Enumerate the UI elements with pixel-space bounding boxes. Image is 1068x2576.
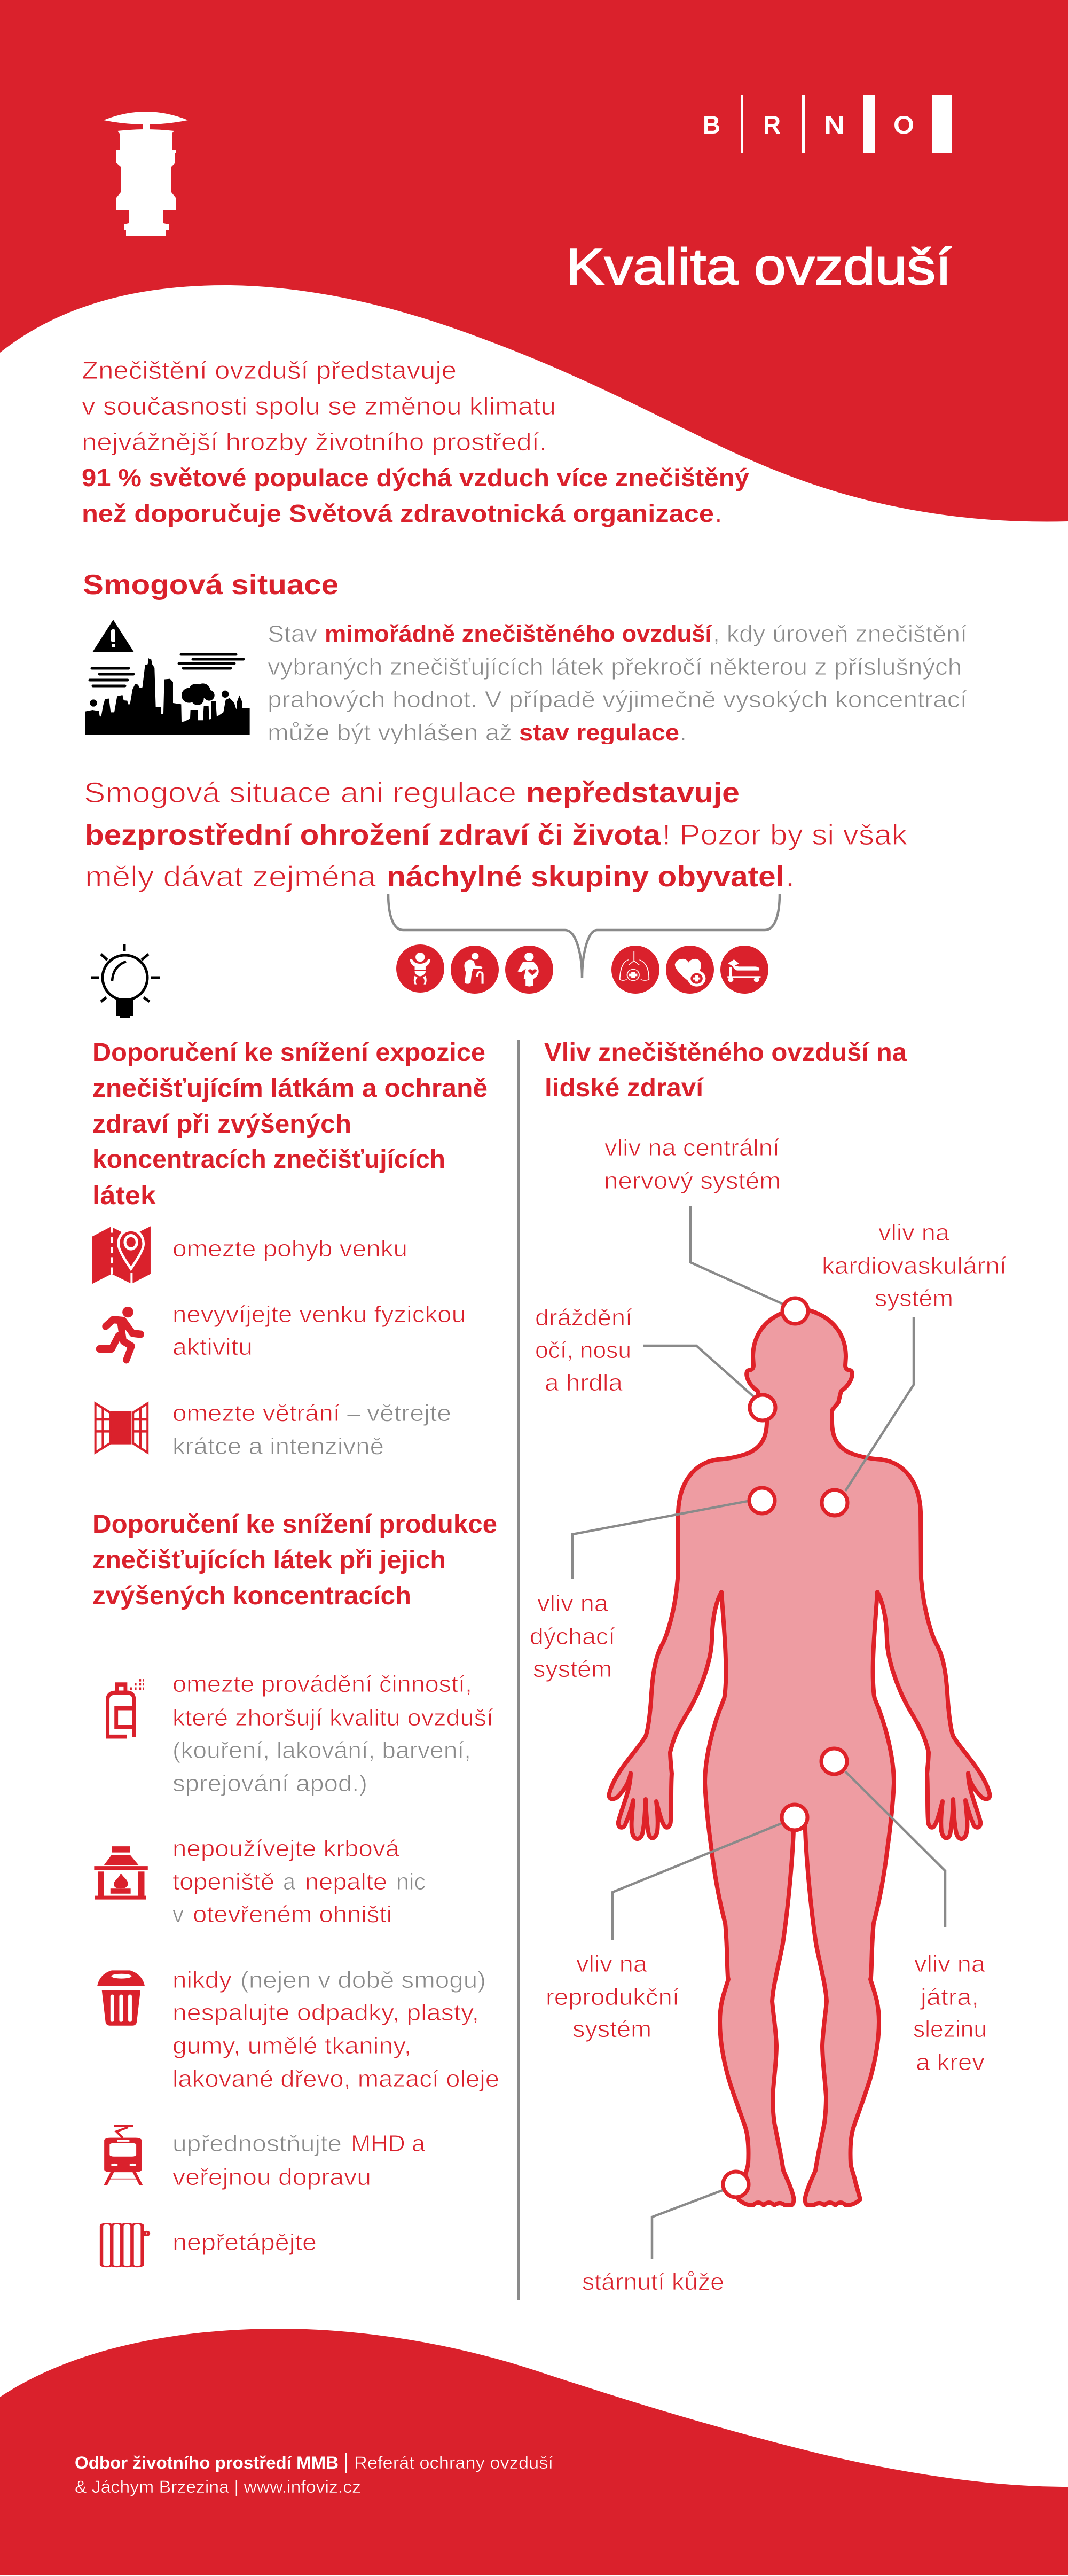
label: reproductive system: systém xyxy=(572,2016,651,2042)
intro text: nejvážnější hrozby životního prostředí. xyxy=(82,428,547,456)
brace xyxy=(388,894,780,978)
item: avoid physical activity: nevyvíjejte venku fyzickou xyxy=(172,1301,466,1328)
statement: no direct threat: měly dávat zejména xyxy=(85,861,376,893)
heading: exposure reduction: koncentracích znečišťujících xyxy=(92,1145,445,1174)
icon: radiator xyxy=(101,2224,148,2267)
footer credits: Referát ochrany ovzduší xyxy=(354,2453,553,2472)
item: limit ventilation xyxy=(172,1400,451,1459)
label: central nervous system: vliv na centrální xyxy=(604,1135,780,1161)
label: skin aging: stárnutí kůže xyxy=(582,2269,724,2295)
logo: BRNO: B xyxy=(703,111,720,139)
item: never burn waste: (nejen v době smogu) xyxy=(240,1967,486,1993)
paragraph: smog situation definition xyxy=(262,621,968,751)
item: no fireplaces: nepoužívejte krbová xyxy=(172,1836,400,1862)
logo: BRNO: R xyxy=(763,111,781,139)
heading: production reduction: zvýšených koncentracích xyxy=(92,1582,411,1610)
item: never burn waste: nespalujte odpadky, plasty, xyxy=(172,2000,479,2026)
item: no fireplaces: v xyxy=(172,1901,184,1927)
paragraph: smog situation definition: stav regulace xyxy=(519,720,679,746)
item: limit ventilation: – xyxy=(347,1400,361,1426)
icon: spray can xyxy=(106,1680,144,1737)
footer credits xyxy=(75,2453,553,2496)
statement: no direct threat xyxy=(84,777,908,893)
heading: production reduction xyxy=(92,1510,497,1610)
item: no fireplaces: otevřeném ohništi xyxy=(193,1901,392,1927)
item: limit polluting activities: omezte provádění činností, xyxy=(172,1671,472,1697)
item: never burn waste: nikdy xyxy=(172,1967,232,1993)
footer wave xyxy=(0,2329,1068,2575)
item: no fireplaces: topeniště xyxy=(172,1869,274,1895)
label: liver, spleen and blood: vliv na xyxy=(914,1951,986,1977)
intro text: . xyxy=(715,499,722,527)
icon: trash bin xyxy=(97,1970,145,2026)
label: cardiovascular system: systém xyxy=(875,1285,953,1312)
item: never burn waste xyxy=(172,1967,499,2092)
statement: no direct threat: náchylné skupiny obyvatel xyxy=(387,861,784,893)
icons: vulnerable groups xyxy=(396,944,768,994)
label: reproductive system: vliv na xyxy=(576,1951,648,1977)
label: cardiovascular system: kardiovaskulární xyxy=(822,1253,1007,1279)
label: central nervous system xyxy=(604,1135,781,1194)
intro text xyxy=(82,356,749,527)
human body figure xyxy=(609,1309,990,2205)
label: liver, spleen and blood xyxy=(913,1951,987,2075)
heading: health effects: Vliv znečištěného ovzduší na xyxy=(544,1039,907,1067)
icon: lungs xyxy=(611,946,659,994)
heading: exposure reduction: zdraví při zvýšených xyxy=(92,1110,351,1138)
footer credits: & Jáchym Brzezina | www.infoviz.cz xyxy=(75,2477,361,2496)
label: cardiovascular system xyxy=(822,1220,1007,1312)
footer credits: Odbor životního prostředí MMB xyxy=(75,2453,339,2472)
paragraph: smog situation definition: vybraných znečišťujících látek překročí některou z příslušných xyxy=(268,654,962,680)
item: limit ventilation: omezte větrání xyxy=(172,1400,341,1426)
item: do not overheat: nepřetápějte xyxy=(172,2229,317,2255)
item: no fireplaces xyxy=(172,1836,426,1927)
label: liver, spleen and blood: slezinu xyxy=(913,2016,987,2042)
heading: Smogová situace: Smogová situace xyxy=(83,569,339,600)
intro text: 91 % světové populace dýchá vzduch více znečištěný xyxy=(82,464,749,491)
statement: no direct threat: bezprostřední ohrožení zdraví či života xyxy=(85,819,661,851)
heading: health effects: lidské zdraví xyxy=(545,1074,704,1102)
icon: map with pin xyxy=(92,1226,151,1284)
icon: pregnant xyxy=(505,946,553,994)
icon: chimney xyxy=(104,112,188,236)
label: cardiovascular system: vliv na xyxy=(878,1220,950,1246)
label: eye, nose and throat irritation: očí, nosu xyxy=(535,1337,631,1363)
heading: production reduction: znečišťujících látek při jejich xyxy=(92,1546,446,1574)
heading: exposure reduction: Doporučení ke snížení expozice xyxy=(92,1039,485,1067)
label: eye, nose and throat irritation: a hrdla xyxy=(545,1370,623,1396)
item: limit outdoor movement: omezte pohyb venku xyxy=(172,1236,407,1262)
item: limit polluting activities: které zhoršují kvalitu ovzduší xyxy=(172,1705,494,1731)
paragraph: smog situation definition: , kdy úroveň znečištění xyxy=(713,621,968,647)
paragraph: smog situation definition: Stav xyxy=(268,621,317,647)
logo: BRNO: O xyxy=(893,111,914,139)
icon: runner xyxy=(99,1307,141,1360)
paragraph: smog situation definition: může být vyhlášen až xyxy=(268,720,512,746)
statement: no direct threat: nepředstavuje xyxy=(526,777,740,809)
label: eye, nose and throat irritation xyxy=(535,1305,633,1396)
label: respiratory system: vliv na xyxy=(537,1590,609,1617)
heading: production reduction: Doporučení ke snížení produkce xyxy=(92,1510,497,1539)
icon: heart xyxy=(666,946,714,994)
title: Kvalita ovzduší xyxy=(566,238,952,295)
header wave xyxy=(0,0,1068,521)
item: limit polluting activities xyxy=(172,1671,494,1797)
logo: BRNO xyxy=(703,95,952,153)
logo: BRNO: N xyxy=(824,111,845,139)
heading: exposure reduction xyxy=(92,1039,488,1210)
body markers xyxy=(723,1298,847,2197)
callout lines xyxy=(572,1206,945,2259)
icon: fireplace xyxy=(94,1846,148,1900)
intro text: v současnosti spolu se změnou klimatu xyxy=(82,392,556,420)
item: no fireplaces: a xyxy=(283,1869,295,1895)
item: limit polluting activities: (kouření, lakování, barvení, xyxy=(172,1737,471,1763)
item: avoid physical activity: aktivitu xyxy=(172,1334,253,1360)
heading: health effects xyxy=(544,1039,907,1102)
label: reproductive system xyxy=(546,1951,680,2042)
heading: exposure reduction: znečišťujícím látkám a ochraně xyxy=(92,1074,488,1103)
label: liver, spleen and blood: játra, xyxy=(920,1984,979,2010)
intro text: Znečištění ovzduší představuje xyxy=(82,356,457,384)
icon: smog city with warning triangle xyxy=(85,620,250,735)
label: reproductive system: reprodukční xyxy=(546,1984,680,2010)
heading: exposure reduction: látek xyxy=(92,1182,156,1210)
paragraph: smog situation definition: . xyxy=(680,720,686,746)
item: prefer public transport xyxy=(172,2130,426,2190)
item: never burn waste: lakované dřevo, mazací oleje xyxy=(172,2066,499,2092)
item: limit polluting activities: sprejování apod.) xyxy=(172,1770,367,1797)
item: limit ventilation: větrejte xyxy=(367,1400,451,1426)
label: central nervous system: nervový systém xyxy=(604,1168,781,1194)
icon: hospital bed xyxy=(720,946,768,994)
label: respiratory system: dýchací xyxy=(530,1623,616,1650)
icon: elderly xyxy=(451,946,499,994)
label: respiratory system xyxy=(530,1590,616,1682)
item: avoid physical activity xyxy=(172,1301,466,1360)
statement: no direct threat: ! Pozor by si však xyxy=(662,819,908,851)
label: liver, spleen and blood: a krev xyxy=(916,2049,985,2075)
paragraph: smog situation definition: prahových hodnot. V případě výjimečně vysokých koncentrací xyxy=(268,686,968,713)
item: limit ventilation: krátce a intenzivně xyxy=(172,1433,384,1459)
intro text: než doporučuje Světová zdravotnická organizace xyxy=(82,499,714,527)
paragraph: smog situation definition: mimořádně znečištěného ovzduší xyxy=(325,621,713,647)
statement: no direct threat: . xyxy=(786,861,794,893)
item: no fireplaces: nic xyxy=(396,1869,426,1895)
icon: light bulb xyxy=(91,944,160,1018)
item: prefer public transport: upřednostňujte xyxy=(172,2130,342,2157)
label: respiratory system: systém xyxy=(533,1656,612,1682)
item: prefer public transport: MHD a xyxy=(351,2130,426,2157)
statement: no direct threat: Smogová situace ani regulace xyxy=(84,777,516,809)
column divider xyxy=(517,1040,520,2300)
label: eye, nose and throat irritation: dráždění xyxy=(535,1305,633,1331)
item: prefer public transport: veřejnou dopravu xyxy=(172,2164,371,2190)
icon: window xyxy=(96,1403,147,1453)
icon: infant xyxy=(396,944,444,993)
item: never burn waste: gumy, umělé tkaniny, xyxy=(172,2033,411,2059)
item: no fireplaces: nepalte xyxy=(305,1869,387,1895)
icon: tram xyxy=(104,2126,142,2185)
